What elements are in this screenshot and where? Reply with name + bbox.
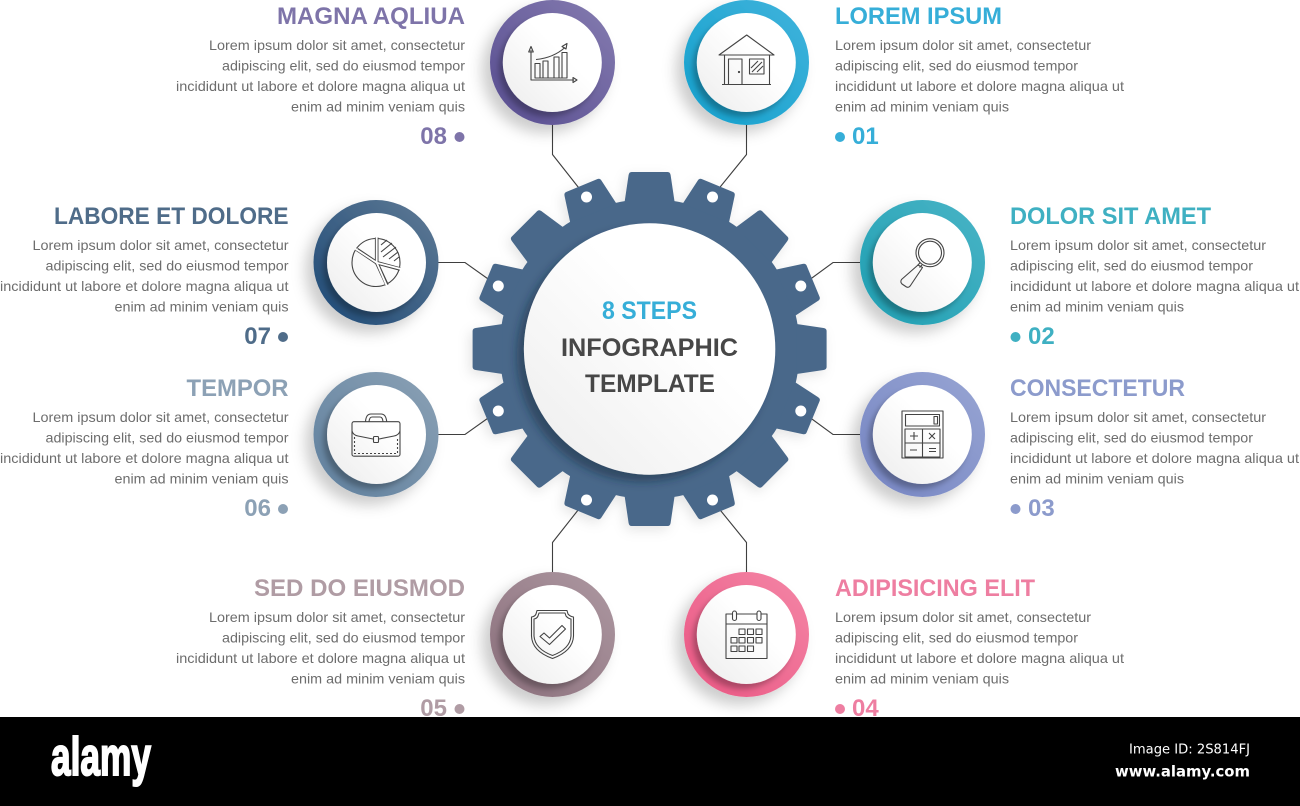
step 01: lorem ipsum: [684, 0, 1124, 150]
gear holes: [493, 192, 806, 506]
heading: ADIPISICING ELIT: [835, 575, 1035, 602]
center disc: [524, 223, 775, 475]
body text: [176, 37, 465, 115]
body text: [835, 37, 1124, 115]
body text: [1010, 237, 1299, 315]
step 07: labore et dolore: [0, 200, 438, 350]
number: [244, 323, 288, 350]
body text: enim ad minim veniam quis: [114, 299, 288, 315]
body text: adipiscing elit, sed do eiusmod tempor: [1010, 430, 1253, 446]
body text: Lorem ipsum dolor sit amet, consectetur: [1010, 409, 1266, 425]
icon: magnifier: [901, 239, 944, 287]
body text: enim ad minim veniam quis: [835, 671, 1009, 687]
number: [244, 495, 288, 522]
body text: adipiscing elit, sed do eiusmod tempor: [46, 430, 289, 446]
body text: incididunt ut labore et dolore magna aliqua ut: [0, 450, 289, 466]
body text: enim ad minim veniam quis: [291, 671, 465, 687]
body text: Lorem ipsum dolor sit amet, consectetur: [209, 609, 465, 625]
number: [420, 123, 464, 150]
body text: adipiscing elit, sed do eiusmod tempor: [222, 630, 465, 646]
heading: LOREM IPSUM: [835, 3, 1002, 30]
body text: Lorem ipsum dolor sit amet, consectetur: [835, 37, 1091, 53]
body text: [1010, 409, 1299, 487]
icon: shield: [532, 610, 574, 658]
center title: [561, 297, 738, 398]
center title: TEMPLATE: [585, 370, 715, 398]
body text: enim ad minim veniam quis: [114, 471, 288, 487]
body text: enim ad minim veniam quis: [835, 99, 1009, 115]
body text: incididunt ut labore et dolore magna aliqua ut: [0, 278, 289, 294]
footer url: www.alamy.com: [1115, 762, 1250, 780]
heading: CONSECTETUR: [1010, 375, 1185, 402]
step 04: adipisicing elit: [684, 572, 1124, 722]
body text: adipiscing elit, sed do eiusmod tempor: [1010, 258, 1253, 274]
body text: incididunt ut labore et dolore magna aliqua ut: [176, 650, 465, 666]
body text: [176, 609, 465, 687]
number: [835, 123, 879, 150]
icon: pie chart: [352, 236, 402, 288]
body text: [0, 237, 289, 315]
body text: incididunt ut labore et dolore magna aliqua ut: [176, 78, 465, 94]
center title: 8 STEPS: [602, 297, 697, 325]
footer logo: alamy: [51, 727, 151, 787]
body text: Lorem ipsum dolor sit amet, consectetur: [32, 409, 289, 425]
body text: Lorem ipsum dolor sit amet, consectetur: [835, 609, 1091, 625]
icon: house: [719, 35, 774, 84]
step 05: sed do eiusmod: [176, 572, 615, 722]
number: 07: [244, 323, 271, 350]
heading: SED DO EIUSMOD: [254, 575, 465, 602]
step 03: consectetur: [860, 372, 1299, 522]
number: [420, 695, 464, 722]
number: 06: [244, 495, 271, 522]
body text: adipiscing elit, sed do eiusmod tempor: [222, 58, 465, 74]
body text: Lorem ipsum dolor sit amet, consectetur: [209, 37, 465, 53]
number: [835, 695, 879, 722]
body text: enim ad minim veniam quis: [291, 99, 465, 115]
footer image id: Image ID: 2S814FJ: [1129, 742, 1250, 758]
body text: [835, 609, 1124, 687]
heading: TEMPOR: [186, 375, 288, 402]
body text: enim ad minim veniam quis: [1010, 471, 1184, 487]
center title: INFOGRAPHIC: [561, 334, 738, 362]
body text: incididunt ut labore et dolore magna aliqua ut: [1010, 278, 1299, 294]
gear: [473, 172, 827, 526]
body text: adipiscing elit, sed do eiusmod tempor: [46, 258, 289, 274]
body text: Lorem ipsum dolor sit amet, consectetur: [32, 237, 289, 253]
icon: briefcase: [352, 414, 400, 456]
number: 05: [420, 695, 447, 722]
number: 01: [852, 123, 879, 150]
body text: adipiscing elit, sed do eiusmod tempor: [835, 630, 1078, 646]
body text: Lorem ipsum dolor sit amet, consectetur: [1010, 237, 1266, 253]
step 08: magna aqliua: [176, 0, 615, 150]
body text: [0, 409, 289, 487]
body text: incididunt ut labore et dolore magna aliqua ut: [835, 650, 1124, 666]
number: 08: [420, 123, 447, 150]
heading: MAGNA AQLIUA: [277, 3, 465, 30]
number: [1010, 495, 1055, 522]
connector lines: [438, 125, 860, 572]
step 06: tempor: [0, 372, 438, 522]
heading: DOLOR SIT AMET: [1010, 203, 1211, 230]
body text: incididunt ut labore et dolore magna aliqua ut: [1010, 450, 1299, 466]
number: 03: [1028, 495, 1055, 522]
step 02: dolor sit amet: [860, 200, 1299, 350]
number: [1010, 323, 1055, 350]
number: 04: [852, 695, 879, 722]
body text: incididunt ut labore et dolore magna aliqua ut: [835, 78, 1124, 94]
icon: calendar: [726, 611, 767, 658]
body text: adipiscing elit, sed do eiusmod tempor: [835, 58, 1078, 74]
icon: calculator: [902, 411, 943, 458]
body text: enim ad minim veniam quis: [1010, 299, 1184, 315]
footer bar: [0, 717, 1300, 806]
number: 02: [1028, 323, 1055, 350]
heading: LABORE ET DOLORE: [54, 203, 288, 230]
icon: growth chart: [529, 44, 577, 82]
